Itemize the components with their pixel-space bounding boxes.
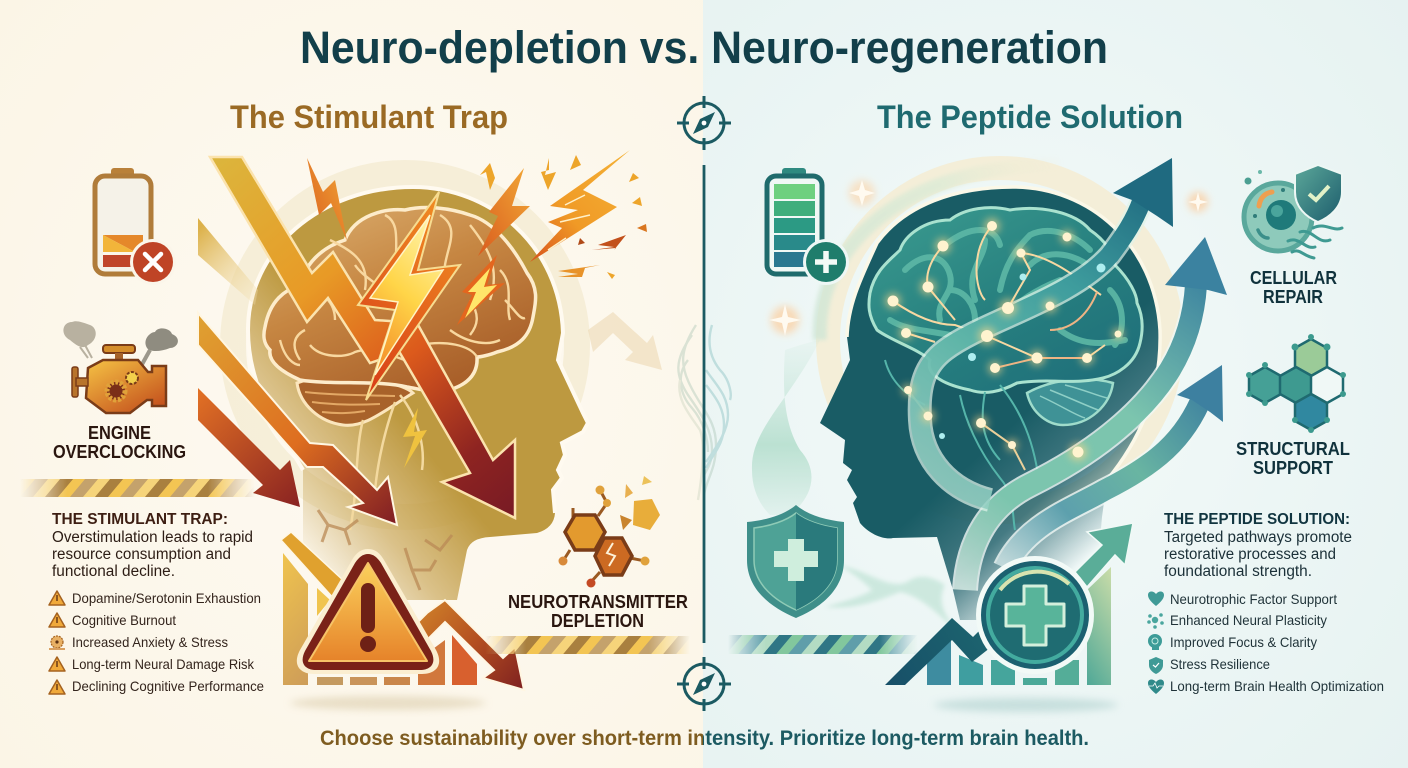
list: peptide benefits [1147, 591, 1384, 694]
icon: top left bolt [307, 158, 347, 241]
icon: sparkles [769, 180, 1208, 336]
label: structural support [1236, 439, 1350, 478]
glowing neural nodes [885, 218, 1124, 461]
brain stem [350, 395, 423, 530]
panel: stimulant trap background [0, 0, 703, 768]
focus head icon [1148, 634, 1162, 650]
text block: stimulant trap [52, 511, 253, 580]
footer message: Choose sustainability over short-term intensity. Prioritize long-term brain health. [320, 727, 1089, 750]
anxiety icon [49, 636, 65, 649]
swoosh: shield wisps [825, 565, 955, 630]
small lightning in neck [403, 408, 427, 468]
chart: declining bars with warning [281, 532, 524, 710]
arrow: chart decline [400, 600, 524, 690]
sparks and fragments [480, 155, 647, 279]
cerebrum [869, 208, 1142, 392]
arrow: ribbon one [920, 158, 1173, 500]
text block: peptide solution: Targeted pathways promote [1164, 529, 1352, 546]
label: cellular repair [1250, 268, 1337, 307]
chart: growth bars with plus badge [885, 523, 1133, 712]
text block: peptide solution: foundational strength. [1164, 563, 1312, 580]
panel: peptide solution background [703, 0, 1408, 768]
neck molecule cracks [318, 510, 452, 590]
text block: peptide solution [1164, 511, 1352, 580]
icon: bolt outer [478, 168, 530, 256]
text block: peptide solution: restorative processes and [1164, 546, 1336, 563]
label: engine overclocking: OVERCLOCKING [53, 442, 186, 462]
arrow: main zigzag decline [210, 157, 515, 518]
arrow: ribbon two [965, 237, 1227, 590]
text block: peptide solution: THE PEPTIDE SOLUTION: [1164, 511, 1350, 528]
icon: broken neurotransmitter molecule [558, 476, 660, 588]
list item: Long-term Neural Damage Risk [72, 656, 255, 672]
icon: structural support hexagons [1246, 334, 1346, 433]
shield icon [1149, 657, 1163, 674]
arrow: bottom decline [198, 388, 300, 507]
text block: stimulant trap: functional decline. [52, 563, 175, 580]
heading: the stimulant trap: The Stimulant Trap [230, 99, 508, 135]
arrow: ribbon three [1005, 365, 1223, 568]
cerebellum [297, 377, 413, 425]
arrow: growth line [885, 618, 1000, 685]
heading: the peptide solution: The Peptide Solution [877, 99, 1183, 135]
head silhouette [248, 187, 588, 600]
arrows: faded decline arrow right of head [588, 312, 662, 370]
warning icon 5 [49, 680, 65, 694]
heart icon [1148, 591, 1164, 606]
arrow: pale stripe [198, 218, 258, 305]
illustration: depleted head and brain [233, 173, 588, 600]
heart icon [1148, 679, 1164, 694]
title: Neuro-depletion vs. Neuro-regeneration [300, 22, 1108, 73]
icon: warning triangle [297, 549, 439, 674]
icon: top compass [677, 96, 731, 150]
central divider with wave [678, 165, 731, 643]
list item: Stress Resilience [1170, 656, 1270, 672]
cerebrum [264, 208, 536, 392]
head silhouette [820, 187, 1160, 620]
swoosh: left green ribbon [752, 340, 820, 515]
list item: Increased Anxiety & Stress [72, 634, 228, 650]
head halo outline [847, 187, 1160, 480]
badge: plus circle [976, 556, 1094, 674]
hazard stripe right [728, 635, 918, 654]
text block: stimulant trap: THE STIMULANT TRAP: [52, 511, 228, 528]
plasticity icon [1147, 613, 1164, 629]
list item: Dopamine/Serotonin Exhaustion [72, 590, 261, 606]
hazard stripe left [20, 479, 255, 497]
warning icon 4 [49, 657, 65, 671]
list item: Neurotrophic Factor Support [1170, 591, 1337, 607]
icon: protective shield [747, 505, 844, 618]
illustration: regenerating head and brain [820, 165, 1172, 620]
icon: central lightning bolt [358, 192, 460, 400]
label: neurotransmitter depletion: NEUROTRANSMITTER [508, 592, 688, 612]
text block: stimulant trap: resource consumption and [52, 546, 231, 563]
label: structural support: STRUCTURAL [1236, 439, 1350, 459]
list item: Cognitive Burnout [72, 612, 176, 628]
list item: Declining Cognitive Performance [72, 678, 264, 694]
label: engine overclocking: ENGINE [88, 423, 151, 443]
arrow: large lower decline [198, 313, 397, 525]
icon: empty battery with cross [95, 168, 176, 285]
brain stem [885, 360, 1040, 530]
label: structural support: SUPPORT [1253, 458, 1333, 478]
icon: shattered bolt [530, 150, 630, 262]
list item: Improved Focus & Clarity [1170, 634, 1317, 650]
icon: cellular repair [1244, 165, 1342, 258]
icon: overclocked engine [63, 321, 178, 413]
label: cellular repair: REPAIR [1263, 287, 1323, 307]
hazard stripe middle [485, 636, 690, 654]
head halo outline [248, 187, 588, 513]
list item: Enhanced Neural Plasticity [1170, 612, 1327, 628]
cerebellum [1027, 379, 1113, 425]
label: neurotransmitter depletion: DEPLETION [551, 611, 644, 631]
icon: right brain bolt [457, 255, 505, 325]
text block: stimulant trap: Overstimulation leads to rapid [52, 529, 253, 546]
icon: full battery with plus [767, 168, 849, 285]
neural pathways [893, 226, 1105, 470]
label: cellular repair: CELLULAR [1250, 268, 1337, 288]
list item: Long-term Brain Health Optimization [1170, 678, 1384, 694]
label: engine overclocking [53, 423, 186, 462]
icon: bottom compass [677, 657, 731, 711]
label: neurotransmitter depletion [508, 592, 688, 631]
warning icon 1 [49, 591, 65, 605]
warning icon 2 [49, 613, 65, 627]
list: stimulant risks [49, 590, 264, 694]
